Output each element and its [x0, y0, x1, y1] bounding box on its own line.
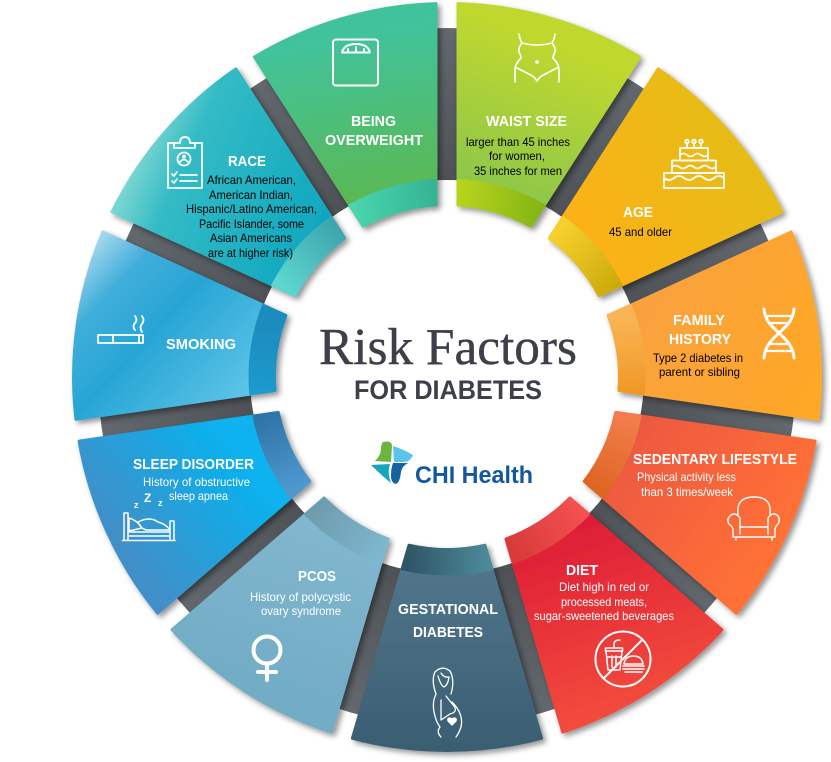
description: for women,	[489, 149, 545, 163]
description	[143, 475, 250, 503]
description: sugar-sweetened beverages	[534, 609, 674, 623]
description: larger than 45 inches	[466, 135, 570, 149]
panel: gestational diabetes	[352, 545, 542, 750]
panel: race	[103, 61, 382, 338]
icon: clipboard	[168, 137, 202, 188]
description	[186, 173, 317, 260]
heading: GESTATIONAL	[398, 601, 498, 618]
panel: sleep disorder	[68, 361, 333, 618]
description: History of polycystic	[250, 590, 351, 604]
heading: SMOKING	[166, 336, 236, 353]
icon: cigarette	[98, 316, 144, 343]
panel: being overweight	[251, 0, 490, 242]
heading	[325, 113, 423, 149]
panel: age	[512, 61, 791, 338]
description: processed meats,	[561, 595, 647, 609]
heading: BEING	[351, 113, 396, 130]
heading: WAIST SIZE	[486, 113, 567, 130]
panel: diet	[458, 467, 729, 742]
title: Risk Factors	[319, 319, 577, 376]
heading: DIABETES	[413, 624, 483, 641]
panel: sedentary lifestyle	[561, 361, 826, 618]
icon: sleeping z's	[134, 491, 163, 510]
description	[466, 135, 570, 178]
heading	[398, 601, 498, 641]
icon: venus symbol	[254, 636, 280, 680]
description: are at higher risk)	[208, 246, 293, 260]
description	[653, 351, 743, 379]
description: Physical activity less	[637, 470, 736, 484]
heading: OVERWEIGHT	[325, 132, 423, 149]
description: sleep apnea	[169, 489, 228, 503]
heading	[669, 312, 731, 348]
heading: HISTORY	[669, 331, 731, 348]
dark ring behind segments	[174, 104, 720, 650]
heading: FAMILY	[673, 312, 725, 329]
description	[637, 470, 736, 499]
description: Hispanic/Latino American,	[186, 202, 317, 216]
panel: smoking	[64, 230, 294, 447]
logo: CHI Health	[371, 442, 533, 489]
icon: sleeping z's: Z	[144, 491, 151, 505]
heading: PCOS	[298, 568, 336, 585]
panel: pcos	[165, 467, 436, 742]
subtitle: FOR DIABETES	[354, 375, 542, 405]
description: History of obstructive	[143, 475, 250, 489]
heading: SLEEP DISORDER	[133, 456, 254, 473]
heading: SEDENTARY LIFESTYLE	[633, 451, 797, 468]
panel: waist size	[404, 0, 643, 242]
icon: cake	[664, 140, 724, 188]
description: American Indian,	[209, 188, 293, 202]
heading: RACE	[228, 153, 266, 170]
panel: family history	[600, 230, 830, 447]
description	[250, 590, 351, 618]
description: Pacific Islander, some	[199, 217, 304, 231]
description: Type 2 diabetes in	[653, 351, 743, 365]
description: African American,	[207, 173, 296, 187]
icon: sleeping z's: z	[134, 500, 139, 510]
description: than 3 times/week	[641, 485, 734, 499]
description: 45 and older	[609, 225, 672, 239]
icon: sleeping z's: z	[158, 498, 163, 508]
description	[534, 580, 674, 623]
icon: scale	[333, 40, 378, 86]
icon: armchair	[728, 497, 779, 540]
heading: AGE	[623, 204, 653, 221]
icon: waist	[515, 34, 559, 82]
icon: bed	[122, 513, 175, 540]
description: parent or sibling	[659, 365, 740, 379]
description: 35 inches for men	[474, 164, 562, 178]
description: ovary syndrome	[261, 604, 341, 618]
heading: DIET	[566, 562, 598, 579]
icon: no food	[596, 632, 650, 686]
icon: pregnant woman	[433, 668, 462, 737]
icon: dna	[764, 309, 794, 358]
description: Asian Americans	[210, 231, 292, 245]
logo: CHI Health: CHI Health	[415, 462, 533, 489]
description: Diet high in red or	[559, 580, 649, 594]
